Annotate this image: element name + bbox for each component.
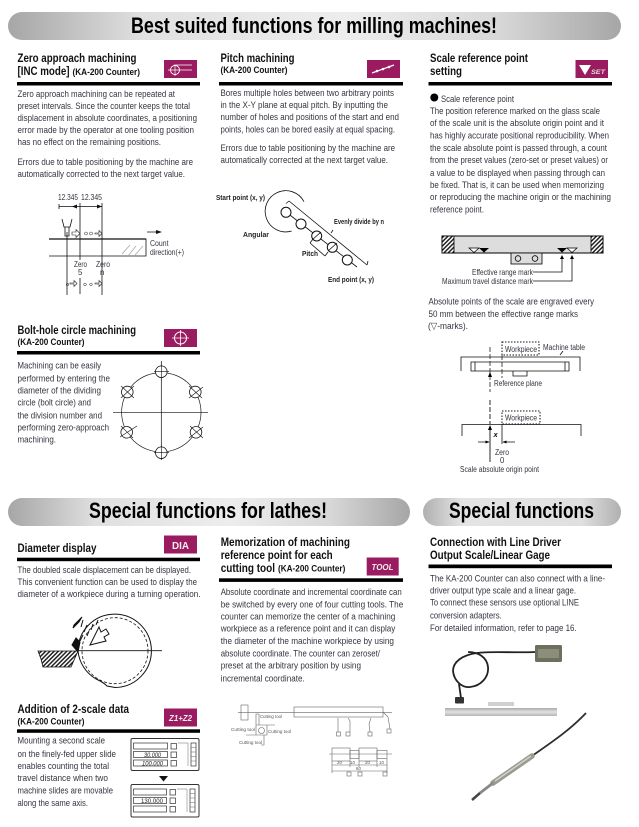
diagram: scale absolute origin: Scale absolute origin point: [460, 465, 540, 474]
diagram: zero approach positions: direction(+): [150, 248, 184, 257]
diagram: cutting tool turret and workpiece: Cutting tool: [231, 727, 255, 732]
heading: addition of 2-scale data: [17, 703, 200, 733]
diagram: scale absolute origin: Workpiece: [505, 414, 537, 422]
heading: memorization of machining reference point: cutting tool: [221, 562, 275, 575]
diagram: cutting tool turret and workpiece: 10: [379, 760, 384, 765]
heading: zero approach machining: [INC mode]: [18, 65, 70, 78]
diagram: scale range marks: Maximum travel distance mark: [442, 277, 533, 286]
text: diameter description: This convenient function can be used to display the: [18, 577, 197, 588]
text: tool memory description: the diameter of the machine workpiece by using: [221, 636, 394, 647]
text: absolute points note: [428, 296, 594, 332]
icon: DIA: [164, 536, 197, 554]
text: tool memory description: counter can memorize the center of a machining: [221, 612, 395, 622]
text: absolute points note: 50 mm between the effective range marks: [428, 309, 578, 320]
text: pitch description: in the X-Y plane at equal pitch. By inputting the: [220, 100, 388, 111]
text: absolute points note: (▽-marks).: [428, 321, 468, 332]
diagram: scale range marks: [442, 236, 603, 286]
text: connection description: [430, 574, 605, 634]
heading: memorization of machining reference point: (KA-200 Counter): [278, 564, 345, 574]
panel: connection with line driver output: [428, 536, 612, 800]
text: scale reference description: be fixed. That is, it can be used when memorizing: [430, 180, 604, 191]
text: zero approach description: has no effect on the remaining positions.: [18, 137, 161, 148]
text: scale reference description: Scale reference point: [441, 94, 514, 105]
diagram: pitch hole layout: Start point (x, y): [216, 193, 265, 202]
text: bolt-hole description: circle (bolt circle) and: [18, 398, 91, 408]
text: bolt-hole description: performed by entering the: [18, 374, 110, 384]
diagram: pitch hole layout: Evenly divide by n: [334, 217, 384, 226]
text: pitch description: automatically corrected at the next target value.: [220, 155, 388, 166]
text: 2-scale description: along the same axis.: [18, 798, 88, 809]
text: bolt-hole description: the division number and: [18, 410, 102, 422]
diagram: cutting tool turret and workpiece: Cutting tool: [239, 740, 262, 745]
text: connection description: For detailed information, refer to page 16.: [430, 623, 577, 634]
diagram: zero approach positions: Zero: [96, 260, 111, 269]
diagram: cutting tool turret and workpiece: 60: [356, 766, 361, 771]
text: zero approach description: Errors due to table positioning by the machine are: [18, 157, 193, 168]
diagram: scale absolute origin: [460, 400, 581, 474]
banner: special functions: Special functions: [449, 498, 594, 523]
text: pitch description: points, holes can be bored easily at equal spacing.: [220, 124, 395, 136]
text: 2-scale description: machine slides are movable: [18, 786, 113, 796]
icon: Z1+Z2: [164, 708, 197, 726]
diagram: zero approach positions: 12.345: [58, 193, 79, 202]
heading: diameter display: [17, 542, 200, 561]
diagram: zero approach positions: Count: [150, 239, 169, 248]
diagram: reference plane: Machine table: [543, 343, 585, 352]
icon: bolt-hole circle: [164, 329, 197, 347]
text: tool memory description: preset at the arbitrary position by using: [221, 660, 361, 672]
heading: connection with line driver: Output Scale/Linear Gage: [430, 549, 550, 562]
banner: special functions for lathes: [8, 498, 410, 526]
text: pitch description: [220, 88, 399, 166]
text: pitch description: number of holes and positions of the start and end: [220, 112, 399, 123]
icon: DIA: DIA: [172, 541, 189, 552]
panel: zero approach machining: [17, 52, 200, 295]
diagram: scale absolute origin: 0: [500, 456, 505, 465]
panel: bolt-hole circle machining: [17, 324, 208, 460]
text: connection description: The KA-200 Counter can also connect with a line-: [430, 574, 605, 584]
diagram: counter display before: 100.000: [142, 762, 164, 768]
text: tool memory description: incremental coordinate.: [221, 674, 305, 684]
heading: pitch machining: Pitch machining: [220, 52, 294, 65]
text: zero approach description: preset intervals. Since the counter keeps the total: [18, 101, 190, 112]
icon: zero approach: [164, 60, 197, 78]
text: tool memory description: absolute coordinate. The counter can zeroset/: [221, 648, 380, 660]
icon: set: SET: [591, 70, 607, 76]
heading: addition of 2-scale data: (KA-200 Counter): [18, 716, 84, 726]
text: pitch description: Errors due to table positioning by the machine are: [220, 143, 395, 154]
text: absolute points note: Absolute points of the scale are engraved every: [428, 296, 594, 308]
diagram: cutting tool turret and workpiece: 20: [337, 760, 342, 765]
heading: pitch machining: (KA-200 Counter): [220, 65, 288, 75]
diagram: zero approach positions: 12.345: [81, 193, 103, 202]
heading: connection with line driver: Connection with Line Driver: [430, 536, 561, 549]
diagram: cutting tool turret and workpiece: Cutting tool: [268, 729, 291, 734]
banner: best suited functions for milling machines: [8, 12, 621, 40]
text: zero approach description: Zero approach machining can be repeated at: [18, 89, 175, 100]
text: tool memory description: workpiece as a reference point and it can display: [220, 624, 395, 634]
text: 2-scale description: Mounting a second scale: [18, 736, 105, 746]
text: scale reference description: [430, 94, 611, 216]
text: connection description: driver output type scale and a linear gage.: [430, 586, 576, 596]
diagram: counter display before: [131, 738, 199, 770]
icon: TOOL: [367, 558, 399, 576]
heading: zero approach machining: (KA-200 Counter): [72, 67, 140, 77]
text: bolt-hole description: diameter of the dividing: [18, 386, 101, 396]
diagram: pitch hole layout: Angular: [243, 230, 269, 239]
heading: scale reference point setting: Scale reference point: [430, 52, 528, 65]
heading: zero approach machining: Zero approach machining: [18, 52, 136, 65]
diagram: reference plane: [461, 342, 585, 392]
text: bolt-hole description: Machining can be easily: [18, 360, 101, 372]
text: 2-scale description: enables counting the total: [18, 761, 109, 772]
heading: memorization of machining reference point: reference point for each: [221, 549, 333, 562]
heading: addition of 2-scale data: Addition of 2-scale data: [18, 703, 129, 716]
heading: bolt-hole circle machining: [17, 324, 200, 354]
text: bolt-hole description: performing zero-approach: [18, 422, 109, 434]
heading: bolt-hole circle machining: (KA-200 Counter): [18, 337, 84, 347]
heading: scale reference point setting: setting: [430, 65, 462, 78]
text: tool memory description: [220, 587, 403, 684]
icon: down arrow: [159, 776, 168, 782]
text: scale reference description: reference point.: [430, 204, 484, 216]
heading: bolt-hole circle machining: Bolt-hole circle machining: [18, 324, 136, 337]
diagram: zero approach positions: 5: [78, 268, 83, 277]
heading: scale reference point setting: [428, 52, 612, 86]
icon: set: [576, 60, 608, 78]
diagram: pitch hole layout: End point (x, y): [328, 275, 374, 284]
text: tool memory description: Absolute coordinate and incremental coordinate can: [221, 587, 402, 598]
text: diameter description: The doubled scale displacement can be displayed.: [18, 565, 191, 576]
diagram: counter display after: [131, 784, 199, 817]
diagram: scale absolute origin: Zero: [495, 448, 510, 457]
diagram: counter display after: 130.000: [141, 799, 164, 805]
text: zero approach description: error made by the operator at one tooling position: [18, 125, 194, 136]
icon: Z1+Z2: Z1+Z2: [168, 714, 193, 723]
diagram: scale range marks: Effective range mark: [472, 268, 533, 277]
photo: linear gage: [472, 713, 586, 800]
text: tool memory description: be switched by every one of four cutting tools. The: [221, 600, 403, 610]
text: diameter description: diameter of a workpiece during a turning operation.: [18, 589, 200, 600]
diagram: scale absolute origin: x: [492, 430, 498, 439]
diagram: cutting tool turret and workpiece: Cutting tool: [260, 714, 282, 719]
heading: zero approach machining: [17, 52, 200, 86]
diagram: zero approach positions: Zero: [74, 260, 88, 269]
text: bolt-hole description: machining.: [18, 434, 56, 446]
text: zero approach description: displacement in absolute coordinates, a positioning: [18, 113, 197, 124]
text: diameter description: [18, 565, 200, 600]
text: scale reference description: of the scale unit is the absolute origin point and it: [430, 118, 604, 129]
heading: memorization of machining reference point: Memorization of machining: [221, 536, 350, 549]
banner: best suited functions for milling machines: Best suited functions for milling machines!: [131, 13, 497, 38]
panel: memorization of machining reference point: [219, 536, 403, 776]
text: 2-scale description: travel distance when two: [18, 773, 108, 784]
text: 2-scale description: on the finely-fed upper slide: [18, 749, 116, 760]
heading: connection with line driver: [428, 536, 612, 568]
icon: TOOL: TOOL: [372, 562, 394, 572]
photo: cable sensor: [453, 645, 562, 704]
panel: addition of 2-scale data: [17, 703, 200, 817]
text: bolt-hole description: [18, 360, 110, 446]
diagram: bolt-hole circle: [113, 361, 208, 460]
heading: memorization of machining reference point: [219, 536, 403, 582]
banner: special functions for lathes: Special functions for lathes!: [89, 498, 327, 523]
text: zero approach description: [18, 89, 197, 180]
text: connection description: To connect these sensors use optional LINE: [430, 598, 579, 608]
diagram: cutting tool turret and workpiece: [231, 705, 392, 776]
diagram: counter display before: 30.000: [144, 753, 162, 759]
text: 2-scale description: [18, 736, 116, 809]
diagram: turning workpiece: [38, 614, 162, 688]
diagram: reference plane: Reference plane: [494, 379, 542, 388]
diagram: zero approach positions: [49, 193, 184, 295]
panel: diameter display: [17, 536, 200, 688]
panel: pitch machining: [216, 52, 403, 284]
heading: pitch machining: [219, 52, 403, 86]
text: pitch description: Bores multiple holes between two arbitrary points: [220, 88, 394, 99]
diagram: pitch hole layout: Pitch: [302, 249, 318, 258]
panel: scale reference point setting: [428, 52, 612, 474]
text: connection description: conversion adapters.: [430, 610, 502, 622]
photo: linear scale: [445, 702, 557, 716]
diagram: zero approach positions: n: [100, 268, 104, 277]
text: scale reference description: The position reference marked on the glass scale: [430, 106, 600, 117]
icon: pitch: [367, 60, 400, 78]
text: zero approach description: automatically corrected to the next target value.: [18, 169, 185, 180]
diagram: cutting tool turret and workpiece: 20: [365, 760, 370, 765]
heading: diameter display: Diameter display: [18, 542, 97, 555]
diagram: reference plane: Workpiece: [505, 345, 537, 354]
text: scale reference description: a value to be displayed when passing through can: [430, 168, 605, 179]
diagram: cutting tool turret and workpiece: 10: [350, 760, 355, 765]
diagram: pitch hole layout: [216, 191, 384, 284]
